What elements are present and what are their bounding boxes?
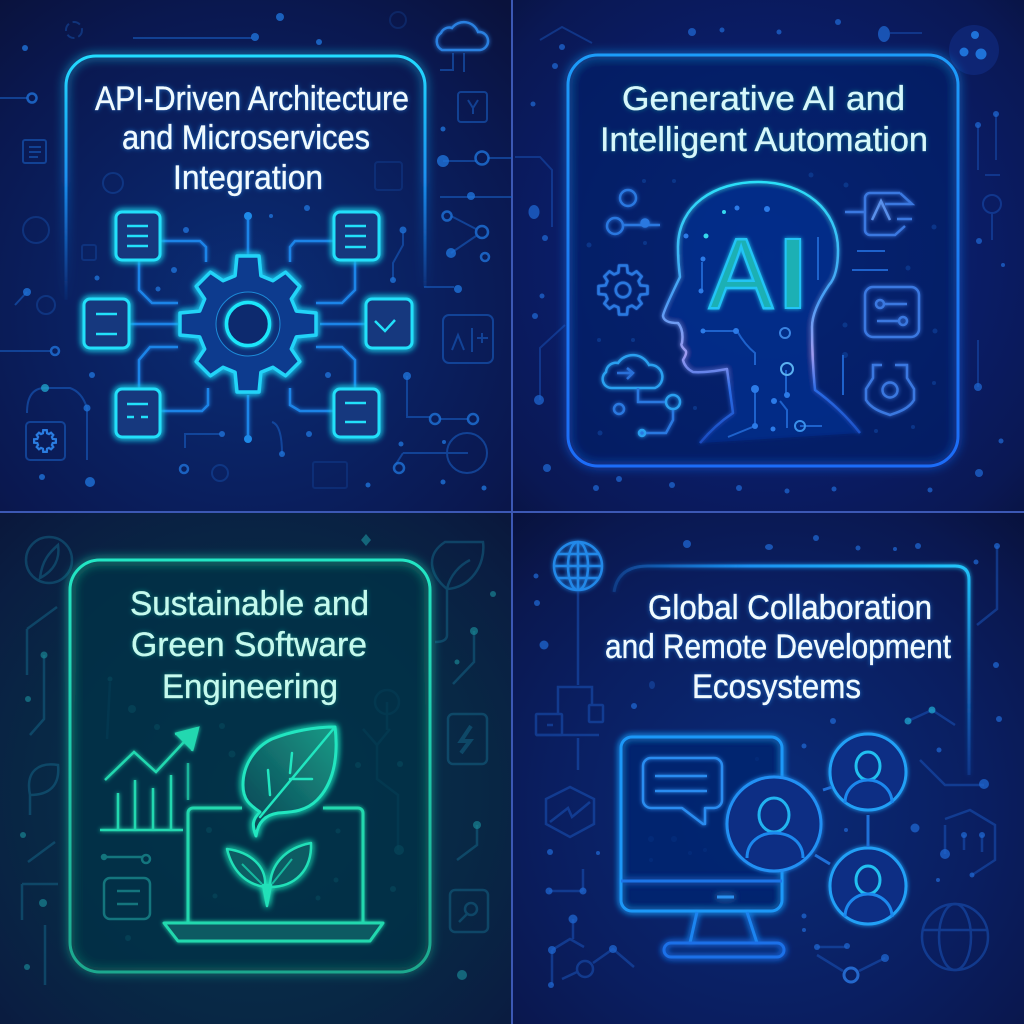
connector lines — [129, 216, 365, 438]
icon: laptop — [164, 808, 383, 941]
title: green: Sustainable and — [130, 585, 369, 623]
background decoration: global — [536, 546, 997, 985]
icon: small gear — [599, 266, 647, 314]
AI lettering — [709, 218, 807, 330]
title: AI: Intelligent Automation — [600, 121, 928, 159]
icon: big leaf — [243, 727, 336, 836]
title: green: Green Software — [131, 626, 367, 664]
icon: link nodes — [607, 190, 660, 234]
icon: top right cloud — [437, 22, 488, 50]
title: API: and Microservices — [122, 119, 370, 157]
title: API: Integration — [173, 159, 323, 197]
head circuit nodes — [684, 206, 805, 432]
panel: global collaboration — [534, 535, 1002, 988]
AI lettering: I — [779, 218, 807, 330]
icon: avatar large — [727, 777, 821, 871]
service box: middle right with check — [366, 299, 412, 348]
title: green: Engineering — [162, 668, 338, 706]
icon: gear in box — [34, 430, 56, 452]
title: green — [130, 585, 369, 706]
ring node: bottom right — [844, 968, 858, 982]
partial frame: global — [614, 566, 969, 775]
chart: growth bars and arrow — [100, 728, 198, 830]
title: API — [95, 80, 409, 197]
panel frame: AI — [568, 55, 958, 466]
panel: API-driven architecture — [0, 12, 512, 490]
icon: monitor — [621, 737, 784, 957]
icon: sprout — [227, 843, 311, 906]
title: AI — [600, 80, 928, 159]
title: global: and Remote Development — [605, 628, 951, 666]
panel: generative AI — [515, 19, 1005, 494]
title: AI: Generative AI and — [622, 80, 905, 118]
connector end nodes — [244, 212, 252, 443]
decoration dots: AI — [528, 19, 1005, 494]
decoration rings: API — [28, 94, 489, 473]
service box: top right — [334, 212, 379, 260]
icon: shield — [866, 365, 914, 415]
icon: central gear — [180, 256, 316, 392]
icon: chat bubble — [643, 758, 722, 824]
icon: avatar bottom — [830, 848, 906, 924]
list row and node — [102, 855, 150, 919]
title: global — [605, 589, 951, 706]
title: API: API-Driven Architecture — [95, 80, 409, 118]
title: global: Ecosystems — [692, 668, 861, 706]
icon: sliders box — [865, 287, 919, 337]
service box: bottom left — [116, 389, 160, 437]
icon: cloud with plane — [603, 355, 680, 436]
icon: globe — [554, 542, 602, 590]
avatar connectors — [815, 787, 868, 864]
service box: top left — [116, 212, 160, 260]
icon: A tag — [845, 193, 912, 235]
icon: avatar top — [830, 734, 906, 810]
AI lettering: A — [709, 218, 773, 330]
decoration blob top right — [949, 25, 999, 75]
background decoration: green — [22, 537, 488, 985]
background circuit decoration: API — [0, 12, 512, 488]
panel frame: API — [66, 56, 425, 300]
decoration nodes: API — [22, 13, 486, 490]
head circuits — [702, 237, 888, 437]
service box: middle left — [84, 299, 129, 348]
service box: bottom right — [334, 389, 379, 437]
panel: green software — [20, 534, 496, 985]
background decoration: AI — [515, 27, 1001, 400]
title: global: Global Collaboration — [648, 589, 932, 627]
icon: head silhouette — [663, 182, 860, 443]
panel frame: green — [70, 560, 430, 972]
dots: green — [20, 534, 496, 980]
dots: global — [534, 535, 1002, 988]
